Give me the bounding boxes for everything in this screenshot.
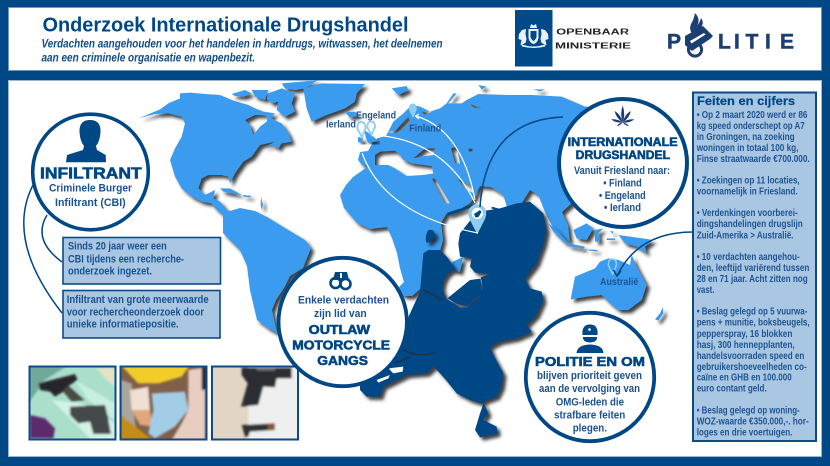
heading: Outlaw Motorcycle Gangs: OUTLAW — [309, 323, 370, 337]
fact: locaties — [697, 176, 800, 198]
map: South America — [223, 208, 311, 333]
circle: Internationale Drugshandel: • Ierland — [604, 202, 641, 214]
fact: beslag: handelsvoorraden speed en — [697, 351, 804, 362]
pin: Ierland — [357, 122, 366, 137]
icon: cannabis leaf — [611, 106, 635, 127]
title: Onderzoek Internationale Drugshandel — [42, 15, 408, 37]
fact: speed: woningen in totaal 100 kg, — [696, 143, 799, 154]
photo: bag with money — [122, 368, 206, 438]
fact: woning — [697, 406, 809, 439]
map: Greenland — [303, 83, 365, 122]
logo: Politie — [667, 13, 794, 56]
map labels: Australië — [600, 276, 638, 288]
logo: Openbaar Ministerie — [515, 10, 632, 66]
circle: Internationale Drugshandel — [559, 99, 687, 227]
fact: speed: in Groningen, na zoeking — [697, 132, 795, 143]
pin: Friesland — [468, 204, 486, 234]
map: Cuba and Caribbean — [220, 188, 263, 210]
circle: Outlaw Motorcycle Gangs — [278, 258, 407, 386]
text box: Infiltrant van grote meerwaarde: unieke informatiepositie. — [67, 319, 179, 331]
map: North America — [139, 93, 292, 215]
heading: Internationale Drugshandel: INTERNATIONALE — [568, 137, 678, 149]
text box: Infiltrant van grote meerwaarde: Infiltrant van grote meerwaarde — [67, 294, 209, 306]
circle: Infiltrant: Infiltrant (CBI) — [55, 197, 126, 209]
circle: Internationale Drugshandel: Vanuit Friesland naar: — [574, 165, 670, 177]
fact: beslag — [697, 307, 810, 395]
fact: speed — [696, 110, 810, 165]
circle: Politie en OM — [526, 313, 654, 441]
heading: Outlaw Motorcycle Gangs — [292, 323, 390, 368]
map: New Guinea — [618, 235, 653, 253]
pin: Finland — [409, 104, 417, 118]
photo: pistols on floor — [30, 368, 114, 438]
map labels: Ierland — [326, 119, 356, 131]
map: Svalbard — [392, 85, 545, 95]
facts heading: Feiten en cijfers — [697, 96, 795, 108]
heading: Infiltrant: INFILTRANT — [40, 165, 142, 182]
circle: Outlaw Motorcycle Gangs: Enkele verdachten — [298, 295, 389, 307]
logo: Openbaar Ministerie: OPENBAAR — [556, 27, 629, 36]
circle: Politie en OM: blijven prioriteit geven — [537, 370, 642, 382]
pin: Australia — [608, 259, 616, 274]
map: Sumatra and Java — [548, 223, 598, 251]
fact: drugslijn: Zuid-Amerika > Australië. — [697, 230, 794, 242]
fact: beslag: euro contant geld. — [697, 384, 767, 395]
world map: Eurasia and Africa — [340, 85, 640, 296]
map: Madagascar patch — [452, 257, 463, 272]
text box: Infiltrant van grote meerwaarde — [63, 290, 220, 338]
heading: Politie en OM: POLITIE EN OM — [535, 354, 645, 369]
map: the Netherlands — [360, 202, 547, 437]
circle: Politie en OM: plegen. — [573, 422, 607, 434]
logo: Politie: P — [667, 30, 681, 54]
arrow: Internationale circle to Friesland — [480, 117, 563, 207]
fact: woning: • Beslag gelegd op woning- — [697, 406, 800, 416]
arrow: facts panel to Australia — [614, 232, 693, 276]
circle: Internationale Drugshandel: • Finland — [603, 177, 642, 189]
map labels — [326, 109, 638, 288]
subtitle: aan een criminele organisatie en wapenbezit. — [42, 50, 255, 64]
fact: verdachten: • 10 verdachten aangehou- — [697, 252, 800, 263]
text box: Sinds 20 jaar: Sinds 20 jaar weer een — [68, 241, 167, 253]
map: Britain and Ireland — [358, 130, 378, 143]
fact: drugslijn: dingshandelingen drugslijn — [697, 219, 803, 230]
fact: beslag: caïne en GHB en 100.000 — [697, 372, 792, 384]
map: Australia — [571, 255, 647, 310]
fact: locaties: • Zoekingen op 11 locaties, — [697, 176, 800, 186]
photo: pistol and magazine — [213, 368, 297, 438]
map labels: Finland — [409, 123, 441, 135]
world map: Americas — [139, 80, 365, 215]
map: Iceland — [345, 112, 358, 117]
map: New Zealand — [655, 307, 663, 321]
map: Tasmania — [612, 315, 615, 318]
pin: Engeland — [367, 122, 375, 135]
fact: beslag: hasj, 300 hennepplanten, — [697, 340, 795, 351]
heading: Outlaw Motorcycle Gangs: GANGS — [317, 354, 368, 368]
text box: Infiltrant van grote meerwaarde: voor rechercheonderzoek door — [67, 306, 205, 318]
circle: Politie en OM: OMG-leden die — [556, 396, 624, 408]
world map: Oceania — [548, 223, 663, 321]
circle: Infiltrant: Criminele Burger — [49, 183, 133, 195]
panel: header — [8, 8, 822, 70]
fact: locaties: voornamelijk in Friesland. — [697, 186, 798, 198]
text box: Sinds 20 jaar — [63, 238, 220, 284]
fact: beslag: pepperspray, 16 blokken — [697, 329, 792, 340]
circle: Infiltrant — [33, 114, 148, 230]
subtitle: Verdachten aangehouden voor het handelen in harddrugs, witwassen, het deelnemen — [42, 37, 442, 51]
fact: drugslijn: • Verdenkingen voorberei- — [697, 208, 798, 219]
connectors: Infiltrant to text boxes — [24, 185, 62, 313]
heading: Outlaw Motorcycle Gangs: MOTORCYCLE — [292, 338, 390, 352]
fact: drugslijn — [697, 208, 803, 242]
map: Arctic islands — [232, 80, 318, 117]
map labels: Engeland — [356, 109, 396, 121]
circle: Politie en OM: aan de vervolging van — [539, 383, 640, 395]
map: Borneo and Sulawesi — [573, 223, 615, 242]
panel: Feiten en cijfers — [693, 92, 816, 441]
arrows: routes from Friesland — [362, 114, 478, 233]
heading: Internationale Drugshandel: DRUGSHANDEL — [576, 150, 670, 162]
fact: woning: loges en drie voertuigen. — [697, 428, 793, 439]
panel: main — [8, 80, 822, 456]
text box: Sinds 20 jaar: onderzoek ingezet. — [68, 265, 152, 277]
circle: Politie en OM: strafbare feiten — [554, 409, 626, 421]
photo frames — [30, 366, 298, 440]
icon: police officer — [576, 324, 604, 353]
circle: Internationale Drugshandel: • Engeland — [599, 190, 646, 202]
logo: Politie: LITIE — [718, 30, 794, 54]
fact: verdachten: vast. — [697, 285, 715, 296]
heading: Internationale Drugshandel — [568, 137, 678, 162]
text box: Sinds 20 jaar: CBI tijdens een recherche- — [68, 253, 184, 265]
subtitle — [42, 37, 442, 64]
circle: Outlaw Motorcycle Gangs: zijn lid van — [314, 308, 367, 320]
icon: handcuffs — [330, 272, 350, 289]
fact: verdachten — [697, 252, 809, 296]
logo: Openbaar Ministerie: MINISTERIE — [555, 41, 632, 50]
icon: person — [66, 120, 106, 162]
